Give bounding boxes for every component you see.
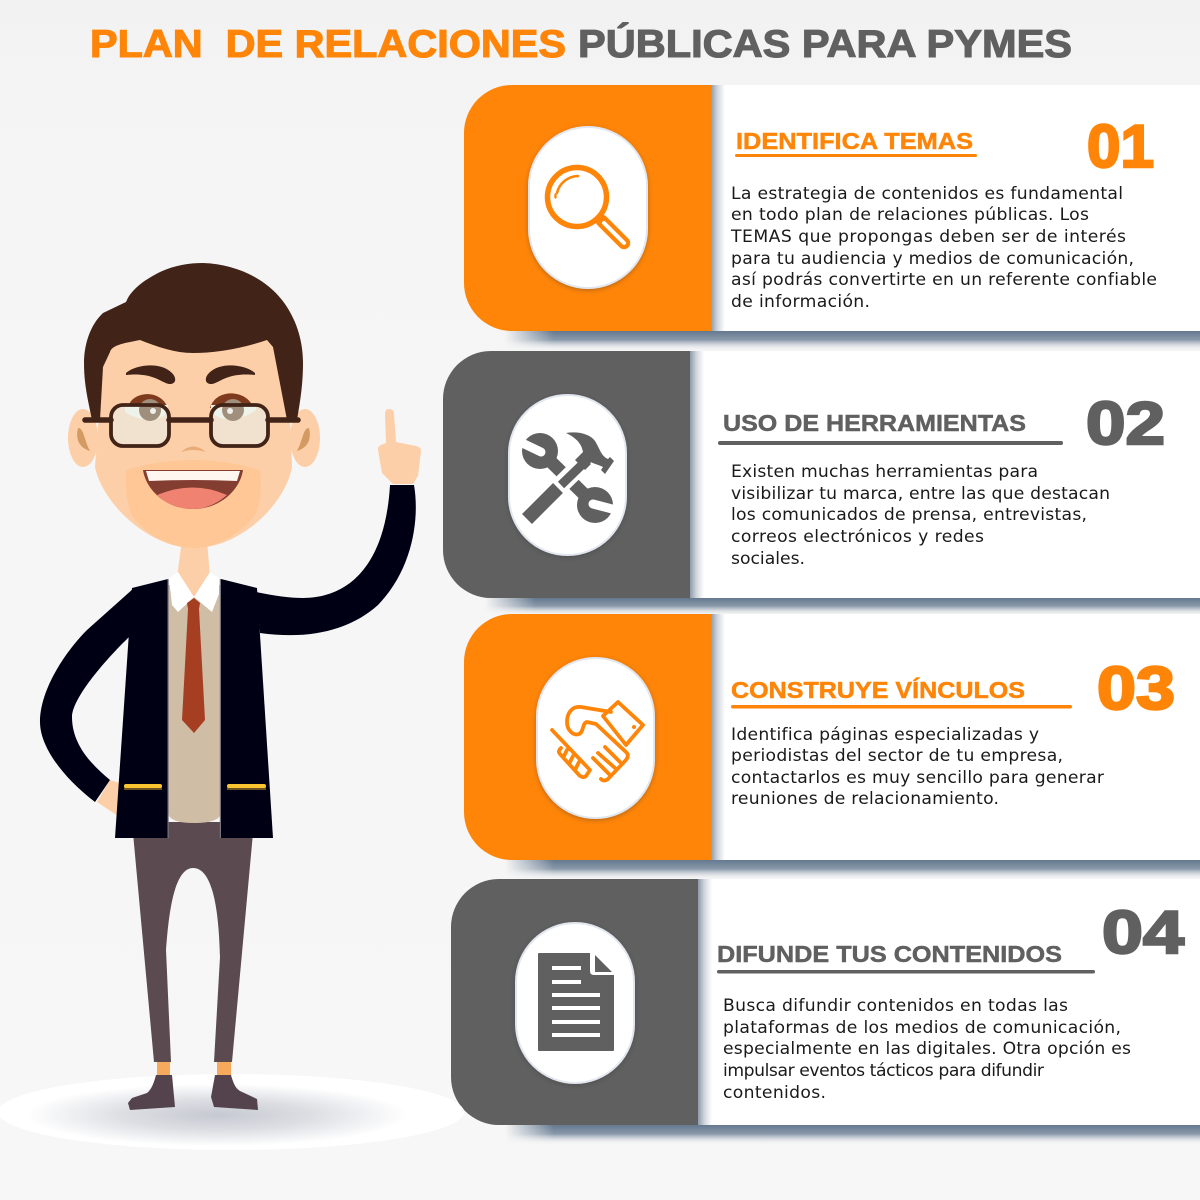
socks — [157, 1062, 231, 1075]
jacket — [115, 579, 273, 838]
teeth — [146, 471, 240, 481]
shoes — [128, 1075, 258, 1110]
panel: 01 identifica temas — [464, 85, 1200, 351]
text block 04 — [723, 996, 1131, 1103]
text block 03: contactarlos es muy sencillo para generar — [731, 768, 1105, 788]
text block 03: Identifica páginas especializadas y — [731, 725, 1039, 745]
text block 04: especialmente en las digitales. Otra opción es — [723, 1039, 1131, 1059]
text block 04: contenidos. — [723, 1083, 826, 1103]
text block 01 — [730, 184, 1157, 312]
number 01: 01 — [1087, 113, 1154, 180]
character: businessman — [40, 263, 421, 1110]
legs and trousers — [132, 822, 254, 1062]
heading 01: IDENTIFICA TEMAS — [736, 128, 973, 154]
ears — [68, 409, 320, 467]
nose — [181, 446, 206, 452]
mouth — [143, 470, 243, 509]
panel: 03 construye vinculos — [464, 614, 1200, 880]
icon badge: tools — [509, 395, 626, 555]
text block 04: impulsar eventos tácticos para difundir — [723, 1061, 1045, 1081]
heading 03 — [731, 676, 1072, 708]
text block 01: La estrategia de contenidos es fundamental — [731, 184, 1123, 204]
icon badge: handshake — [537, 658, 654, 818]
beard shade — [126, 460, 261, 548]
eyes and glasses — [85, 393, 298, 446]
panel: 04 difunde tus contenidos — [451, 879, 1200, 1145]
left arm — [40, 588, 134, 802]
text block 01: en todo plan de relaciones públicas. Los — [731, 205, 1089, 225]
heading 04: DIFUNDE TUS CONTENIDOS — [717, 941, 1062, 967]
text block 02: Existen muchas herramientas para — [731, 462, 1038, 482]
text block 02: los comunicados de prensa, entrevistas, — [731, 505, 1087, 525]
text block 02 — [731, 462, 1110, 569]
heading 04 — [717, 941, 1095, 974]
text block 01: de información. — [731, 292, 870, 312]
icon badge: document — [516, 923, 634, 1083]
heading 03: CONSTRUYE VÍNCULOS — [731, 676, 1025, 703]
text block 01: para tu audiencia y medios de comunicación, — [731, 249, 1134, 269]
text block 04: plataformas de los medios de comunicación, — [723, 1018, 1121, 1038]
text block 02: visibilizar tu marca, entre las que destacan — [731, 484, 1110, 504]
panel: 02 uso de herramientas — [443, 351, 1200, 616]
collar — [169, 572, 219, 612]
hair — [84, 263, 303, 420]
text block 01: TEMAS que propongas deben ser de interés — [730, 227, 1126, 247]
gray tab 04 — [451, 879, 698, 1125]
text block 02: sociales. — [731, 549, 805, 569]
number 04: 04 — [1102, 899, 1185, 966]
pockets — [124, 784, 266, 790]
raised hand — [378, 409, 421, 484]
text block 01: así podrás convertirte en un referente confiable — [731, 270, 1157, 290]
face — [95, 335, 292, 548]
ground shadow ellipse — [0, 1074, 464, 1150]
eyebrows — [126, 365, 255, 384]
orange tab 01 — [464, 85, 711, 331]
orange tab 03 — [464, 614, 711, 860]
heading 02 — [718, 410, 1063, 445]
tongue — [157, 488, 227, 509]
text block 02: correos electrónicos y redes — [731, 527, 984, 547]
number 03: 03 — [1097, 655, 1175, 722]
text block 04: Busca difundir contenidos en todas las — [723, 996, 1068, 1016]
text block 03 — [731, 725, 1105, 809]
title — [90, 22, 1072, 66]
hand at waist — [97, 780, 120, 816]
heading 02: USO DE HERRAMIENTAS — [723, 410, 1026, 436]
text block 03: reuniones de relacionamiento. — [731, 789, 999, 809]
vest — [168, 585, 221, 823]
gray tab 02 — [443, 351, 690, 598]
number 02: 02 — [1086, 390, 1165, 457]
text block 03: periodistas del sector de tu empresa, — [731, 746, 1063, 766]
tie — [182, 598, 205, 733]
right arm raised — [256, 485, 416, 635]
title: PÚBLICAS PARA PYMES — [578, 22, 1072, 66]
title: PLAN DE RELACIONES — [90, 23, 566, 66]
icon badge: magnifier — [529, 127, 647, 288]
neck — [177, 540, 210, 598]
